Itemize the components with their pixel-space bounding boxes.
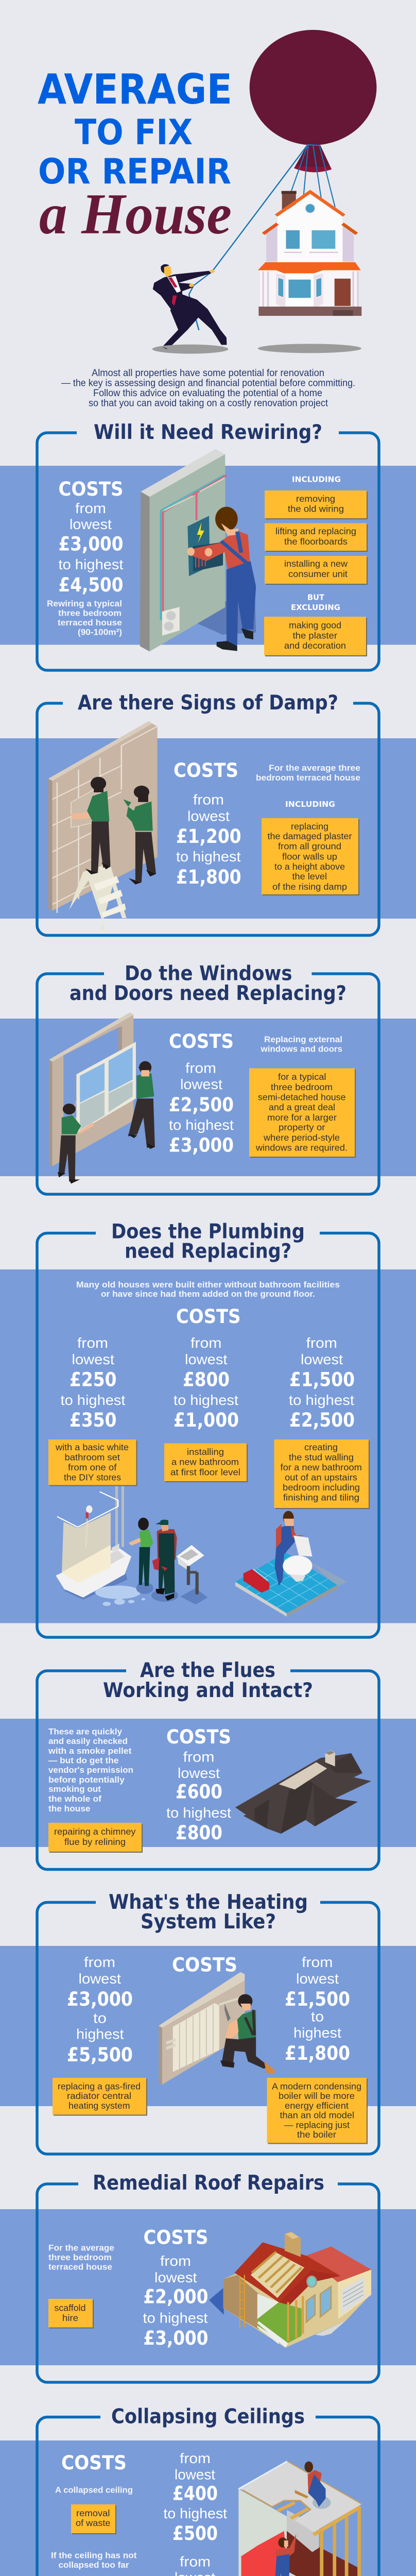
costs: boiler only: highest: [293, 2025, 341, 2041]
text: not collapsed: [51, 2551, 137, 2570]
callout: stud walling: for a new bathroom: [280, 1462, 362, 1472]
callout: damaged plaster: of the rising damp: [272, 882, 347, 892]
text: typical house note: terraced house: [58, 618, 122, 628]
text: average house note: bedroom terraced house: [256, 773, 360, 783]
costs: full repair: lowest: [175, 2467, 215, 2482]
costs: boiler only: lowest: [296, 1971, 339, 1987]
text: old houses: [76, 1280, 340, 1299]
text: smoke pellet advice: the house: [48, 1804, 91, 1814]
text: not collapsed: If the ceiling has not: [51, 2551, 137, 2561]
heading: Working and Intact?: [103, 1679, 313, 1702]
callout: damaged plaster: replacing: [291, 821, 328, 832]
title: AVERAGE: [38, 65, 232, 113]
costs: full repair: £500: [172, 2522, 218, 2545]
costs: lowest: [70, 516, 112, 532]
callout: stud walling: bedroom including: [283, 1482, 360, 1493]
callout: condensing boiler: the boiler: [297, 2129, 336, 2140]
text: collapsed ceiling: A collapsed ceiling: [55, 2485, 133, 2495]
icon: shadows: [152, 344, 361, 354]
costs: to highest: [169, 1117, 234, 1133]
costs column: stud walling: [289, 1335, 355, 1431]
text: not collapsed: collapsed too far: [59, 2561, 129, 2570]
heading: Will it Need Rewiring?: [94, 421, 322, 444]
callout: typical semi-detached: windows are required.: [255, 1143, 348, 1153]
costs column: new bathroom: £1,000: [174, 1409, 239, 1431]
callout: removing old wiring: the old wiring: [288, 504, 344, 514]
panel: rewiring: [0, 421, 416, 670]
callout: gas central heating: [53, 2078, 146, 2114]
costs column: new bathroom: to highest: [174, 1392, 238, 1408]
heading: Collapsing Ceilings: [111, 2405, 305, 2429]
costs: [169, 1030, 234, 1156]
callout: basic white bathroom: the DIY stores: [64, 1472, 121, 1483]
text: typical house note: three bedroom: [58, 609, 122, 618]
title: TO FIX: [75, 112, 193, 153]
callout: first floor bathroom: installing: [187, 1447, 224, 1457]
callout: stud walling: the stud walling: [289, 1452, 354, 1462]
text: smoke pellet advice: [48, 1727, 133, 1814]
heading: [109, 1891, 308, 1934]
costs column: basic: lowest: [72, 1351, 114, 1367]
illustration: house with opened roof: [209, 2232, 371, 2348]
costs column: stud walling: £2,500: [289, 1409, 355, 1431]
callout: floorboards: [265, 523, 367, 551]
costs: COSTS: [169, 1030, 234, 1053]
callout: gas central heating: heating system: [68, 2100, 130, 2111]
panel: plumbing: [0, 1220, 416, 1637]
costs: from: [183, 1749, 214, 1765]
panel: flues: [0, 1659, 416, 1869]
intro text: Follow this advice on evaluating the potential of a home: [93, 387, 322, 399]
costs column: basic: from: [77, 1335, 108, 1351]
costs: plasterboard: [164, 2553, 227, 2576]
costs: £2,000: [143, 2285, 208, 2308]
text: smoke pellet advice: These are quickly: [48, 1727, 123, 1736]
costs column: new bathroom: £800: [183, 1368, 230, 1391]
label: including: INCLUDING: [292, 475, 341, 484]
icon: ropes: [189, 145, 335, 330]
costs: full system: from: [84, 1954, 115, 1970]
costs: [59, 478, 124, 596]
text: smoke pellet advice: before potentially: [48, 1775, 125, 1785]
costs column: new bathroom: lowest: [185, 1351, 228, 1367]
icon: balloon: [250, 30, 376, 172]
label: costs: COSTS: [176, 1306, 241, 1328]
callout: condensing boiler: [267, 2078, 367, 2143]
costs: lowest: [154, 2269, 197, 2285]
costs: £4,500: [59, 574, 124, 596]
callout: chimney relining: [48, 1823, 142, 1852]
illustration: fitter at radiator: [159, 1972, 275, 2084]
illustration: electrician at fuse board: [140, 449, 256, 651]
callout: damaged plaster: [262, 818, 358, 894]
costs: boiler only: £1,500: [285, 1988, 350, 2010]
callout: first floor bathroom: [164, 1444, 247, 1481]
costs: from: [185, 1060, 216, 1076]
callout: damaged plaster: from all ground: [278, 841, 341, 851]
costs: £3,000: [143, 2327, 208, 2349]
callout: making good: [264, 617, 366, 655]
costs column: basic: £250: [70, 1368, 116, 1391]
text: smoke pellet advice: vendor's permission: [48, 1766, 133, 1775]
text: external windows: [260, 1035, 342, 1054]
text: old houses: Many old houses were built either without bathroom facilities: [76, 1280, 340, 1290]
text: smoke pellet advice: — but do get the: [48, 1756, 118, 1765]
text: average house: [48, 2243, 114, 2272]
text: average house note: For the average three: [269, 764, 360, 773]
heading: Are there Signs of Damp?: [78, 691, 338, 715]
callout: removing old wiring: [265, 490, 367, 518]
icon: businessman: [153, 264, 227, 349]
callout: damaged plaster: to a height above: [274, 861, 345, 872]
callout: removing old wiring: removing: [296, 494, 335, 504]
callout: stud walling: [274, 1439, 369, 1508]
heading: What's the Heating: [109, 1891, 308, 1914]
costs: to highest: [143, 2310, 208, 2326]
costs: £2,500: [169, 1094, 234, 1116]
costs: to highest: [176, 849, 241, 865]
intro text: [61, 367, 355, 409]
callout: scaffold hire: scaffold: [55, 2303, 85, 2313]
costs: full repair: [164, 2450, 227, 2545]
heading: and Doors need Replacing?: [70, 982, 346, 1005]
callout: removal of waste: of waste: [76, 2518, 110, 2528]
callout: typical semi-detached: for a typical: [278, 1072, 326, 1082]
costs: COSTS: [166, 1726, 231, 1748]
callout: damaged plaster: the damaged plaster: [268, 831, 352, 841]
costs: full system: highest: [76, 2026, 124, 2042]
costs column: new bathroom: from: [190, 1335, 221, 1351]
callout: condensing boiler: A modern condensing: [272, 2081, 361, 2092]
callout: condensing boiler: — replacing just: [284, 2120, 350, 2130]
title: [38, 65, 232, 246]
callout: making good: and decoration: [284, 640, 346, 651]
callout: typical semi-detached: and a great deal: [269, 1102, 335, 1112]
callout: gas central heating: replacing a gas-fired: [58, 2081, 141, 2092]
heading: System Like?: [141, 1910, 276, 1934]
costs: boiler only: from: [302, 1954, 333, 1970]
text: external windows: Replacing external: [264, 1035, 342, 1044]
costs: lowest: [180, 1076, 222, 1092]
label: but excluding: BUT: [307, 592, 324, 602]
text: smoke pellet advice: the whole of: [48, 1794, 102, 1804]
icon: house: [258, 191, 361, 316]
callout: condensing boiler: boiler will be more: [279, 2091, 355, 2101]
callout: typical semi-detached: property or: [279, 1122, 325, 1132]
costs: full repair: to highest: [164, 2505, 227, 2521]
callout: making good: making good: [289, 620, 341, 631]
label: including: INCLUDING: [285, 800, 335, 809]
text: smoke pellet advice: and easily checked: [48, 1737, 128, 1746]
costs: from: [75, 500, 106, 516]
callout: damaged plaster: the level: [292, 871, 327, 882]
callout: floorboards: lifting and replacing: [275, 526, 356, 536]
callout: scaffold hire: [48, 2299, 93, 2328]
text: old houses: or have since had them added on the ground floor.: [101, 1290, 315, 1299]
panel: heating: [0, 1891, 416, 2154]
callout: consumer unit: consumer unit: [288, 569, 348, 579]
callout: chimney relining: flue by relining: [64, 1837, 126, 1847]
callout: stud walling: creating: [304, 1442, 338, 1452]
costs: COSTS: [143, 2227, 208, 2248]
costs: full system: lowest: [78, 1971, 121, 1987]
callout: removal of waste: removal: [76, 2508, 110, 2518]
intro text: — the key is assessing design and financial potential before committing.: [61, 377, 355, 388]
heading: [103, 1659, 313, 1702]
costs: plasterboard: from: [180, 2553, 211, 2570]
heading: [70, 962, 346, 1005]
text: smoke pellet advice: smoking out: [48, 1785, 101, 1794]
costs: boiler only: to: [311, 2008, 324, 2025]
costs: lowest: [187, 808, 230, 824]
text: smoke pellet advice: with a smoke pellet: [48, 1747, 132, 1756]
callout: floorboards: the floorboards: [284, 536, 348, 547]
callout: first floor bathroom: at first floor level: [170, 1467, 240, 1478]
costs: £1,200: [176, 825, 241, 848]
costs column: stud walling: from: [306, 1335, 337, 1351]
text: average house: terraced house: [48, 2263, 112, 2272]
illustration: plumber with bath and sink: [56, 1484, 348, 1617]
costs: COSTS: [174, 759, 238, 782]
label: costs: COSTS: [172, 1954, 237, 1976]
text: average house note: [256, 764, 360, 783]
heading: need Replacing?: [125, 1240, 291, 1263]
panel: windows and doors: [0, 962, 416, 1194]
callout: basic white bathroom: bathroom set: [65, 1452, 120, 1462]
callout: typical semi-detached: semi-detached house: [258, 1092, 346, 1103]
illustration: plasterers on ladder: [48, 721, 158, 930]
costs column: stud walling: lowest: [301, 1351, 343, 1367]
costs: COSTS: [59, 478, 124, 500]
costs: lowest: [178, 1765, 220, 1781]
callout: chimney relining: repairing a chimney: [54, 1826, 136, 1837]
callout: first floor bathroom: a new bathroom: [171, 1457, 239, 1467]
costs: to highest: [166, 1805, 231, 1821]
panel: damp: [0, 691, 416, 936]
label: but excluding: EXCLUDING: [291, 603, 340, 612]
costs column: stud walling: to highest: [289, 1392, 354, 1408]
callout: basic white bathroom: [48, 1439, 136, 1485]
text: typical house note: Rewiring a typical: [47, 599, 122, 608]
label: costs: COSTS: [61, 2452, 127, 2474]
heading: Does the Plumbing: [111, 1220, 305, 1244]
costs: full system: to: [93, 2010, 107, 2026]
callout: damaged plaster: floor walls up: [282, 851, 337, 861]
illustration: dark tiled roof with chimney: [235, 1750, 371, 1834]
costs: £800: [176, 1822, 222, 1844]
text: external windows: windows and doors: [260, 1045, 342, 1054]
heading: Are the Flues: [140, 1659, 275, 1682]
costs: full system: [67, 1954, 133, 2066]
callout: condensing boiler: than an old model: [280, 2110, 354, 2121]
panel: collapsing ceilings: [0, 2405, 416, 2576]
text: average house: three bedroom: [48, 2253, 112, 2262]
callout: scaffold hire: hire: [62, 2313, 78, 2323]
intro text: Almost all properties have some potential for renovation: [92, 367, 324, 379]
heading: Remedial Roof Repairs: [93, 2172, 324, 2195]
illustration: fitters installing window: [49, 1012, 155, 1184]
costs: £3,000: [59, 533, 124, 555]
title: OR REPAIR: [38, 151, 231, 192]
title: a House: [39, 182, 232, 246]
text: typical house note: [47, 599, 122, 637]
costs column: basic: £350: [70, 1409, 116, 1431]
callout: basic white bathroom: from one of: [68, 1462, 117, 1472]
costs: [166, 1726, 231, 1844]
text: average house: For the average: [48, 2243, 114, 2252]
costs column: new bathroom: [174, 1335, 239, 1431]
illustration: workers repairing ceiling: [238, 2461, 362, 2576]
callout: stud walling: out of an upstairs: [285, 1472, 357, 1483]
callout: gas central heating: radiator central: [67, 2091, 131, 2101]
costs: £1,800: [176, 866, 241, 888]
costs: £3,000: [169, 1134, 234, 1156]
intro text: so that you can avoid taking on a costly renovation project: [89, 398, 328, 409]
costs: boiler only: £1,800: [285, 2042, 350, 2064]
callout: removal of waste: [71, 2504, 115, 2533]
callout: consumer unit: installing a new: [284, 558, 348, 569]
costs: full repair: £400: [172, 2482, 218, 2505]
costs: full repair: from: [180, 2450, 211, 2466]
callout: consumer unit: [265, 556, 367, 584]
illustration: balloon lifting house pulled by businessman: [152, 30, 376, 354]
label: but excluding: [291, 592, 340, 612]
heading: Do the Windows: [125, 962, 292, 985]
callout: basic white bathroom: with a basic white: [55, 1442, 129, 1452]
costs: full system: £3,000: [67, 1988, 133, 2010]
callout: typical semi-detached: more for a larger: [267, 1112, 337, 1123]
costs column: basic: to highest: [61, 1392, 126, 1408]
costs: boiler only: [285, 1954, 350, 2064]
callout: typical semi-detached: [249, 1069, 355, 1157]
costs: [143, 2227, 208, 2349]
costs: from: [193, 791, 224, 808]
callout: typical semi-detached: where period-style: [263, 1132, 340, 1143]
callout: making good: the plaster: [292, 631, 337, 641]
costs: to highest: [59, 556, 124, 572]
costs column: stud walling: £1,500: [289, 1368, 355, 1391]
costs: full system: £5,500: [67, 2044, 133, 2066]
text: typical house note: (90-100m²): [78, 628, 122, 637]
callout: condensing boiler: energy efficient: [285, 2100, 349, 2111]
callout: stud walling: finishing and tiling: [283, 1492, 359, 1502]
panel: roof repairs: [0, 2172, 416, 2382]
costs column: basic: [61, 1335, 126, 1431]
costs: from: [160, 2253, 191, 2269]
heading: [111, 1220, 305, 1263]
callout: typical semi-detached: three bedroom: [271, 1082, 333, 1092]
costs: [174, 759, 241, 888]
costs: £600: [176, 1781, 222, 1803]
